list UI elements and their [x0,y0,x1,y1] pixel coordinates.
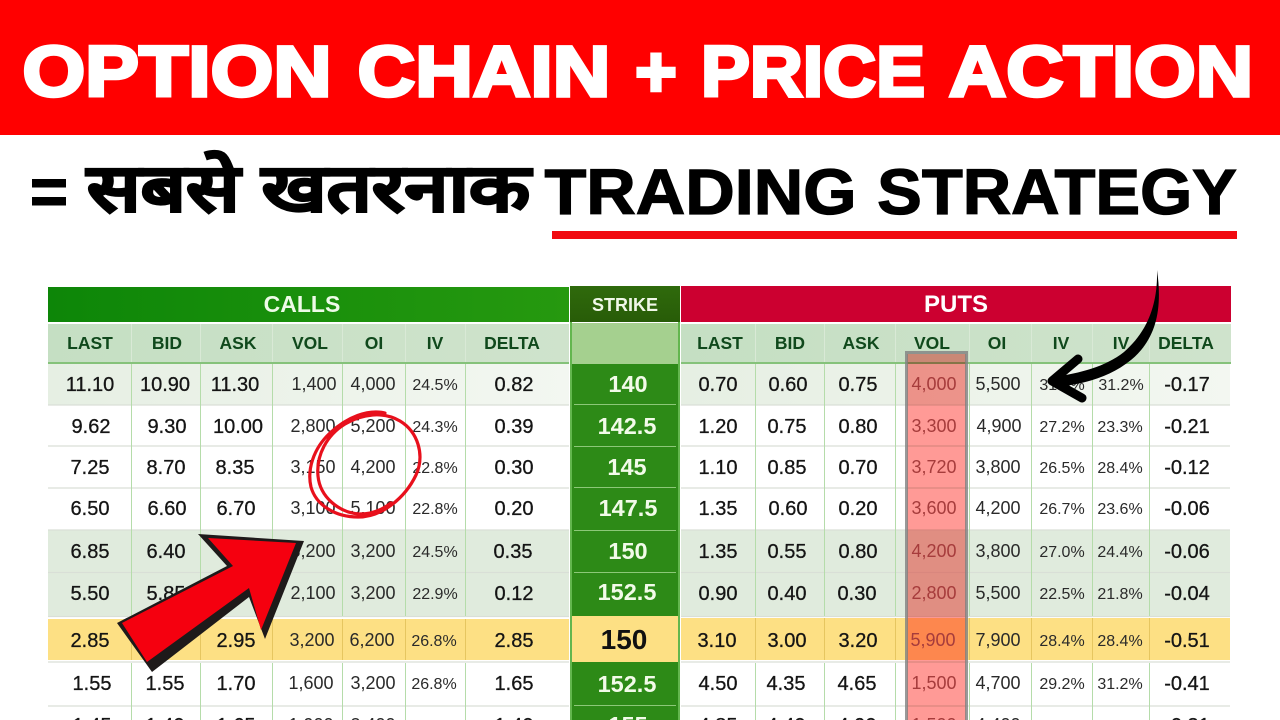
subtitle [32,150,1237,239]
column header row: DELTA [1158,333,1214,353]
strike column: 150 [601,624,647,655]
puts data: 0.30 [838,583,876,605]
column header row: OI [365,333,383,353]
puts data: 2,800 [911,583,957,603]
calls data: 0.12 [495,583,533,605]
puts data: 3,800 [975,541,1021,561]
puts data: 7,900 [975,630,1021,650]
puts data: -0.41 [1164,673,1210,695]
calls data: 6,200 [349,630,395,650]
column header row: VOL [914,333,950,353]
puts data [698,374,1210,720]
calls data: 11.10 [66,374,114,396]
puts data: 0.60 [769,498,807,520]
column header row: IV [1053,333,1070,353]
puts data: 4,700 [975,673,1021,693]
puts data: 0.85 [768,457,806,479]
strike header: STRIKE [592,295,658,315]
calls data: 9.62 [72,416,110,438]
calls data: 9.30 [148,416,186,438]
puts data: 5,500 [975,374,1021,394]
title text [22,32,1253,112]
puts data: 1,500 [911,673,957,693]
column header row: VOL [292,333,328,353]
row backgrounds [48,364,1230,720]
column header row: LAST [697,333,743,353]
puts data: 31.2% [1098,377,1144,394]
strike column: 145 [607,454,647,480]
puts data: 29.2% [1039,676,1085,693]
calls data: 22.8% [412,501,458,518]
strike column: 147.5 [599,495,657,521]
title text: + [635,32,677,112]
puts data: 28.4% [1097,633,1143,650]
calls data: 5,100 [350,498,396,518]
column header row [48,323,1231,364]
trading strategy text [544,156,1237,228]
strike column: 140 [608,371,648,397]
title banner [0,0,1280,135]
title text: CHAIN [358,32,610,112]
equals sign [32,179,66,206]
strike column: 152.5 [598,579,656,605]
puts data: 3,720 [911,457,957,477]
calls data: 3,200 [290,541,336,561]
puts data: 0.80 [839,541,877,563]
puts data: 31.2% [1097,676,1143,693]
calls data: 1.55 [73,673,111,695]
calls data: 10.90 [140,374,190,396]
calls data [66,374,533,720]
calls data: 6.60 [148,498,186,520]
puts data: 23.3% [1097,419,1143,436]
puts data: 4,200 [911,541,957,561]
puts data: 5,900 [910,630,956,650]
puts data: 3,800 [975,457,1021,477]
puts data: 0.75 [839,374,877,396]
column header row: IV [427,333,444,353]
puts data: -0.06 [1164,498,1210,520]
puts data: 0.40 [768,583,806,605]
calls data: 2.95 [217,630,255,652]
calls data: 5.50 [71,583,109,605]
puts data: 26.5% [1039,460,1085,477]
calls data: 0.39 [495,416,533,438]
calls data: 1.70 [217,673,255,695]
puts data: 22.5% [1039,586,1085,603]
puts header [681,286,1231,322]
puts data: 5,500 [975,583,1021,603]
calls data: 3,200 [350,541,396,561]
big red arrow [117,534,304,672]
puts data: 4.35 [767,673,805,695]
column header row: ASK [843,333,880,353]
puts data: 0.90 [699,583,737,605]
calls data: 11.30 [211,374,259,396]
puts header: PUTS [924,291,988,318]
calls data: 6.70 [217,498,255,520]
red underline [552,231,1237,239]
calls data: 24.5% [412,377,458,394]
calls data: 2,800 [290,416,336,436]
calls data: 2.85 [71,630,109,652]
calls data: 8.70 [147,457,185,479]
calls data: 0.82 [495,374,533,396]
calls header [48,287,569,322]
puts data: 3.20 [839,630,877,652]
calls data: 26.8% [411,676,457,693]
calls data: 3,100 [290,498,336,518]
calls data: 4,000 [350,374,396,394]
puts data: 21.8% [1097,586,1143,603]
puts data: 3,300 [911,416,957,436]
calls data: 22.9% [412,586,458,603]
puts data: -0.21 [1164,416,1210,438]
calls data: 10.00 [213,416,263,438]
puts data: 27.0% [1039,544,1085,561]
calls data: 0.35 [494,541,532,563]
title text: PRICE [701,32,925,112]
puts data: -0.17 [1164,374,1210,396]
puts data: 4.65 [838,673,876,695]
trading strategy text: STRATEGY [877,156,1237,228]
title text: ACTION [949,32,1253,111]
calls data: 3,200 [350,583,396,603]
column header row: ASK [220,333,257,353]
strike column: 142.5 [598,413,656,439]
black curved arrow [1052,270,1159,398]
trading strategy text: TRADING [544,157,857,228]
puts data: 0.55 [768,541,806,563]
puts data: 1.35 [699,498,737,520]
puts data: 1.10 [699,457,737,479]
puts data: -0.12 [1164,457,1210,479]
calls data: 1,600 [288,673,334,693]
calls data: 3,150 [290,457,336,477]
calls header: CALLS [264,291,340,317]
puts data: -0.51 [1164,630,1210,652]
puts data: 4,900 [976,416,1022,436]
puts data: 0.60 [769,374,807,396]
puts data: 0.70 [699,374,737,396]
calls data: 7.25 [71,457,109,479]
calls data: 4,200 [350,457,396,477]
puts data: 4,000 [911,374,957,394]
puts data: 4,200 [975,498,1021,518]
puts data: -0.04 [1164,583,1210,605]
puts data: 3.10 [698,630,736,652]
calls data: 5.85 [147,583,185,605]
puts data: 0.20 [839,498,877,520]
title text: OPTION [22,32,332,112]
puts data: 28.4% [1039,633,1085,650]
puts data: 4.50 [699,673,737,695]
calls data: 1,400 [291,374,337,394]
calls data: 8.35 [216,457,254,479]
strike column: 150 [608,538,648,564]
puts data: 0.75 [768,416,806,438]
column header row: BID [775,333,805,353]
column header row: LAST [67,333,113,353]
puts data: 1.20 [699,416,737,438]
calls data: 6.40 [147,541,185,563]
calls data: 3,200 [289,630,335,650]
puts data: -0.06 [1164,541,1210,563]
strike column: 152.5 [598,671,656,697]
calls data: 3,200 [350,673,396,693]
puts data: 3.00 [768,630,806,652]
puts data: 24.4% [1097,544,1143,561]
calls data: 26.8% [411,633,457,650]
calls data: 6.85 [71,541,109,563]
calls data: 2.85 [495,630,533,652]
calls data: 1.65 [495,673,533,695]
puts data: 0.80 [839,416,877,438]
column header row: OI [988,333,1006,353]
puts data: 0.70 [839,457,877,479]
hand-drawn red circle [310,412,420,517]
puts data: 3,600 [911,498,957,518]
hindi words: सबसे खतरनाक [85,150,533,225]
column header row: DELTA [484,333,540,353]
calls data: 24.3% [412,419,458,436]
calls data: 24.5% [412,544,458,561]
calls data: 0.30 [495,457,533,479]
column header row: BID [152,333,182,353]
column header row: IV [1113,333,1130,353]
vol highlight column [906,352,966,720]
strike header [570,286,680,322]
puts data: 1.35 [699,541,737,563]
puts data: 26.7% [1039,501,1085,518]
calls data: 2,100 [290,583,336,603]
calls data: 6.50 [71,498,109,520]
calls data: 5,200 [350,416,396,436]
calls data: 22.8% [412,460,458,477]
strike column [570,322,680,720]
puts data: 23.6% [1097,501,1143,518]
calls data: 0.20 [495,498,533,520]
calls data: 1.55 [146,673,184,695]
option chain table [48,286,1231,720]
puts data: 28.4% [1097,460,1143,477]
puts data: 27.2% [1039,419,1085,436]
puts data: 31.5% [1039,377,1085,394]
